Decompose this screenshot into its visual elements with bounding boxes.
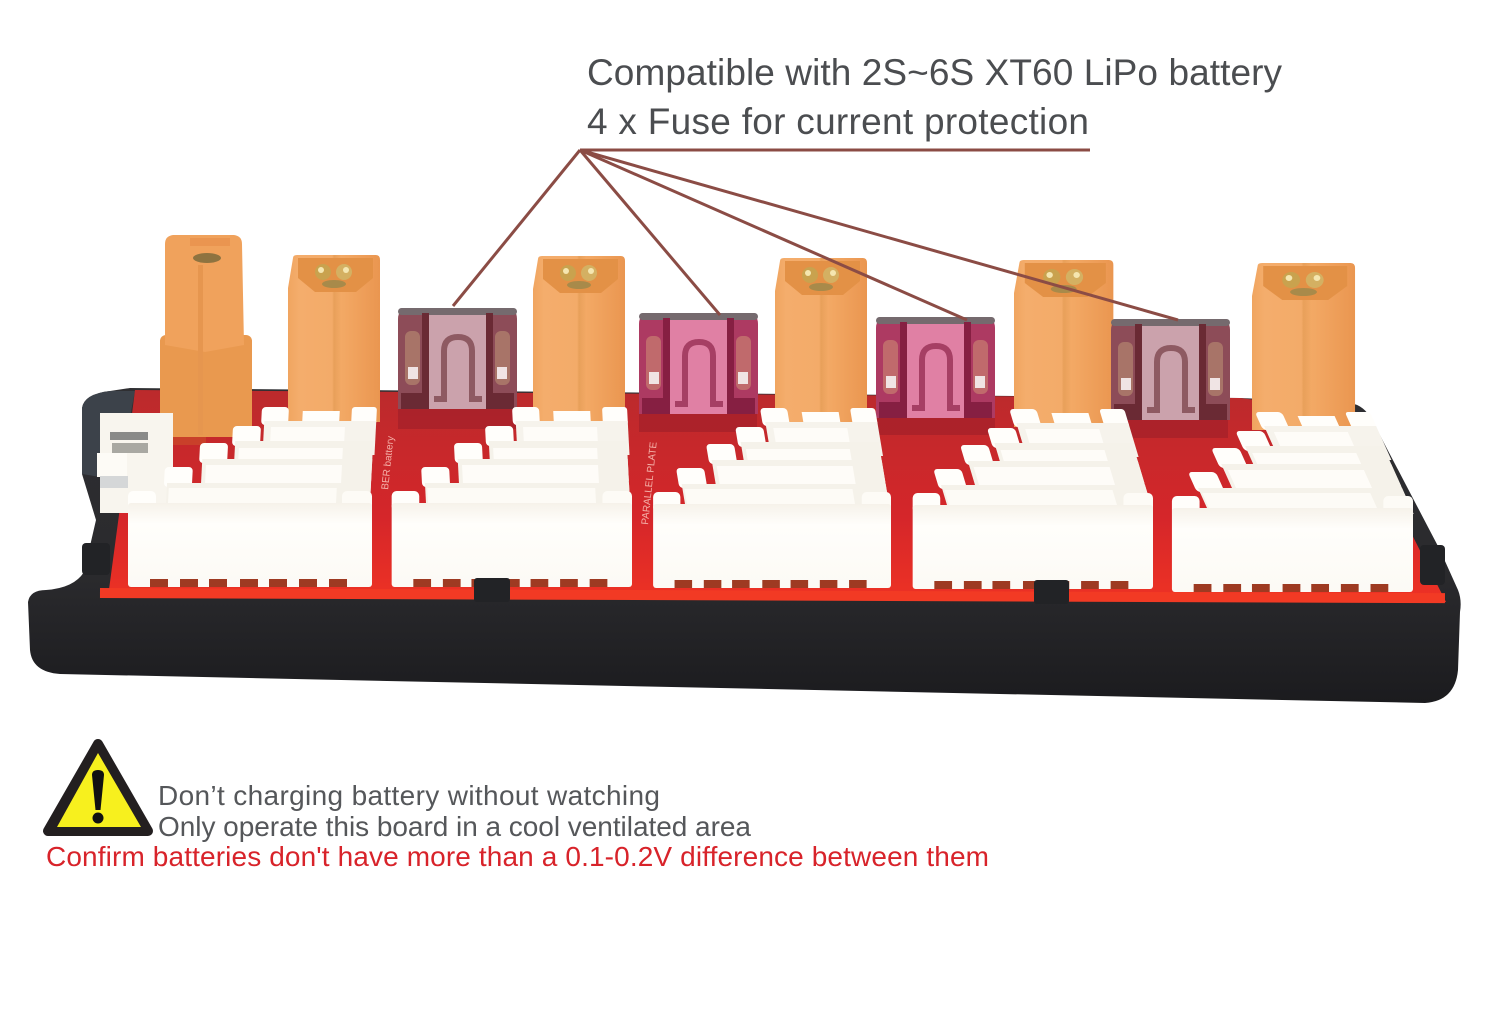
balance connector bank 4 rear rows — [915, 409, 1155, 511]
warning text: Only operate this board in a cool ventilated area — [158, 811, 751, 842]
icon: warning triangle — [48, 744, 148, 831]
XT60 connector 4 — [1014, 260, 1113, 427]
silkscreen labels: BER battery — [380, 436, 397, 490]
fuse 3 magenta — [876, 317, 995, 418]
fuse 4 maroon — [1111, 319, 1230, 420]
callout heading: compatibility and fuse protection: Compatible with 2S~6S XT60 LiPo battery — [587, 52, 1282, 93]
XT60 connector: side-on — [160, 235, 252, 445]
XT60 connector 3 — [775, 258, 867, 425]
warning text: Confirm batteries don't have more than a 0.1-0.2V difference between them — [46, 841, 989, 872]
balance connector bank 5 front — [1172, 496, 1413, 592]
callout heading: compatibility and fuse protection — [587, 52, 1282, 142]
balance connector bank 3 front — [653, 492, 891, 588]
balance connector bank 1 front — [128, 491, 372, 587]
XT60 connector 5 — [1252, 263, 1355, 430]
fuse 1 maroon — [398, 308, 517, 409]
XT60 connector 2 — [533, 256, 625, 423]
XT60 connector 1 — [288, 255, 380, 422]
black plastic tray — [28, 388, 1461, 703]
silkscreen labels — [380, 436, 660, 525]
warning text — [46, 780, 989, 872]
fuse 2 magenta — [639, 313, 758, 414]
tray clips — [82, 543, 1445, 604]
callout heading: compatibility and fuse protection: 4 x Fuse for current protection — [587, 101, 1089, 142]
balance connector bank 3 rear rows — [666, 408, 892, 510]
leader lines to fuses — [453, 150, 1178, 320]
balance connector bank 4 front — [913, 493, 1153, 589]
balance connector bank 2 front — [392, 491, 632, 587]
product photo: parallel charging board — [28, 235, 1461, 703]
silkscreen labels: PARALLEL PLATE — [640, 441, 660, 525]
balance connector bank 1 rear rows — [163, 407, 377, 509]
fuse reflections on the board — [398, 409, 1228, 438]
warning text: Don’t charging battery without watching — [158, 780, 660, 811]
red circuit board — [108, 390, 1446, 602]
balance connector bank 5 rear rows — [1161, 412, 1416, 514]
balance connector bank 2 rear rows — [418, 407, 632, 509]
left grey side bump — [82, 391, 135, 480]
small side balance plug — [97, 413, 173, 513]
